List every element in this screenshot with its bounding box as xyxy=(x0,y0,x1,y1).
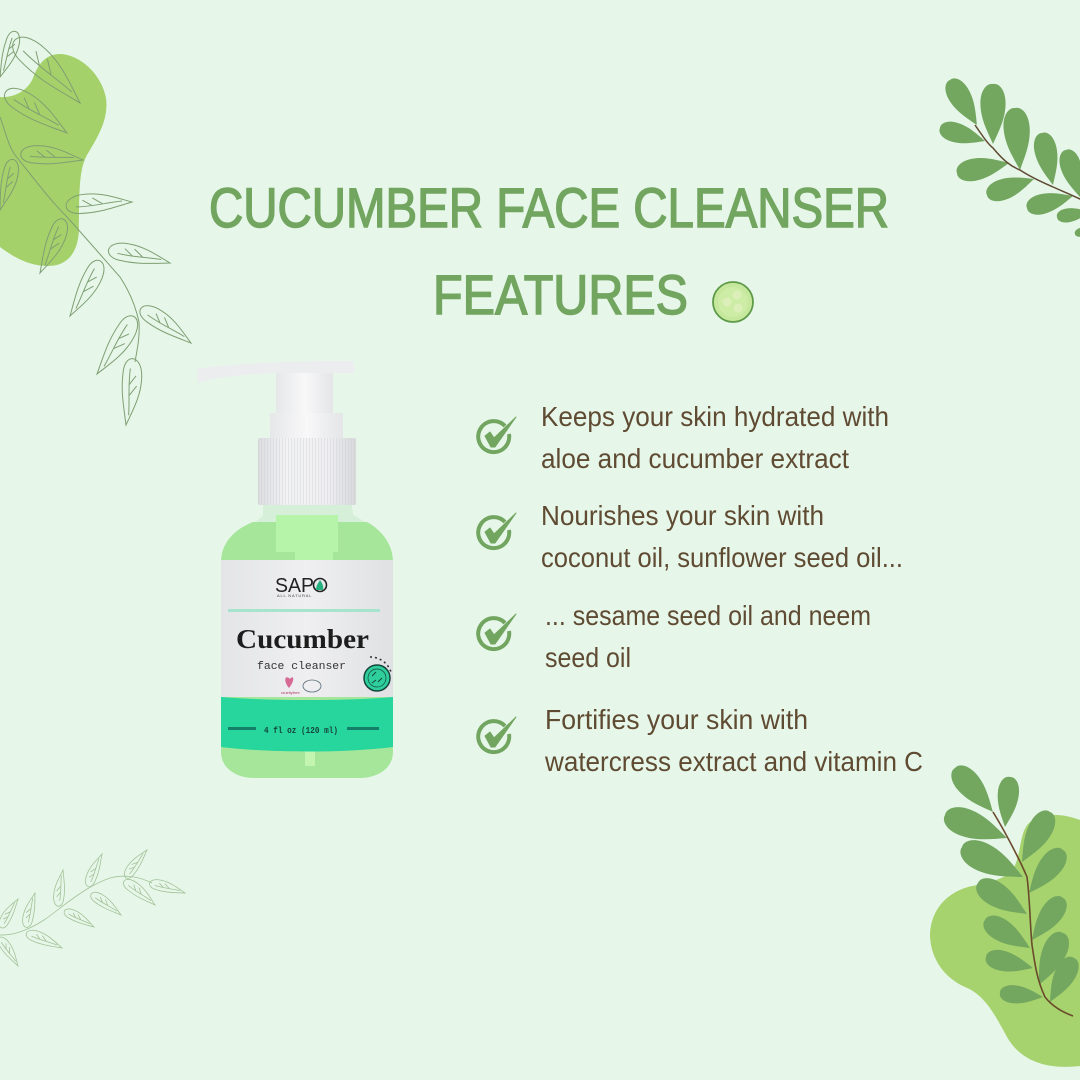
product: pump bottle: face cleanser xyxy=(257,661,346,673)
check icon 4 xyxy=(478,717,516,752)
volume: 4 fl oz (120 ml) xyxy=(264,726,338,736)
decoration: solid branch top right xyxy=(937,74,1080,238)
ribbed cap xyxy=(258,438,356,505)
feature 2: coconut oil, sunflower seed oil... xyxy=(541,542,903,573)
sticker xyxy=(364,665,390,691)
label xyxy=(221,560,393,697)
feature 2: Nourishes your skin with xyxy=(541,500,824,531)
product: pump bottle: ALL NATURAL xyxy=(277,593,312,598)
feature 4 xyxy=(478,704,923,777)
feature 3 xyxy=(478,600,871,673)
badges xyxy=(285,677,293,688)
product: pump bottle: crueltyfree xyxy=(281,690,300,695)
decoration: outline branch top left xyxy=(0,29,196,426)
feature 4: Fortifies your skin with xyxy=(545,704,808,735)
title: CUCUMBER FACE CLEANSER xyxy=(209,176,889,239)
title: FEATURES xyxy=(433,263,688,326)
feature 1: Keeps your skin hydrated with xyxy=(541,401,889,432)
clear neck xyxy=(253,505,367,524)
product: pump bottle xyxy=(197,361,393,778)
feature list xyxy=(478,401,923,777)
decoration: outline branch bottom left xyxy=(0,847,187,969)
product name: Cucumber xyxy=(236,624,369,654)
pump head xyxy=(197,361,355,383)
feature 1: aloe and cucumber extract xyxy=(541,443,849,474)
bottle body xyxy=(221,522,393,778)
feature 1 xyxy=(478,401,889,474)
feature 4: watercress extract and vitamin C xyxy=(544,746,923,777)
feature 3: seed oil xyxy=(545,642,631,673)
blob: bottom right xyxy=(930,815,1080,1067)
decoration: solid branch bottom right xyxy=(940,760,1080,1016)
check icon 3 xyxy=(478,614,516,649)
feature 3: ... sesame seed oil and neem xyxy=(545,600,871,631)
check icon 1 xyxy=(478,417,516,452)
feature 2 xyxy=(478,500,903,573)
icon: cucumber slice xyxy=(713,282,753,322)
title xyxy=(209,176,889,326)
check icon 2 xyxy=(478,513,516,548)
blob: top left xyxy=(0,54,106,266)
brand: SAP xyxy=(275,575,314,597)
